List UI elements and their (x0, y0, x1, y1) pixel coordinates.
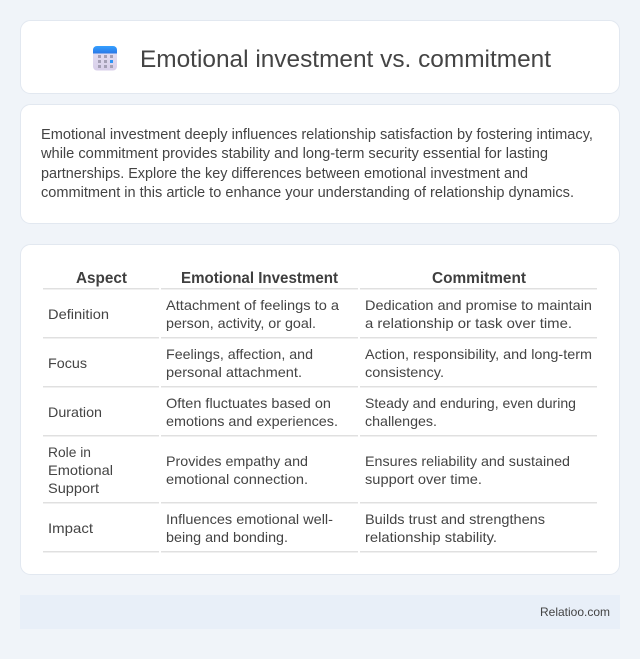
table row: focus: Focus (48, 355, 87, 371)
table row: definition: Dedication and promise to maintain (365, 297, 592, 313)
table row: role in emotional support (48, 444, 570, 496)
table row: duration: emotions and experiences. (166, 413, 338, 429)
table row: duration: Steady and enduring, even during (365, 395, 576, 411)
table row: focus: consistency. (365, 364, 444, 380)
table row: duration: Often fluctuates based on (166, 395, 331, 411)
panel: introduction (20, 104, 620, 224)
panel: comparison table (20, 244, 620, 574)
table row: duration (48, 395, 576, 429)
title: Emotional investment vs. commitment (140, 46, 551, 73)
table row: definition (48, 297, 592, 331)
table header row (76, 270, 526, 287)
text block: introduction paragraph: Emotional investment deeply influences relationship satisfaction by fostering intimacy, (41, 127, 593, 143)
text block: introduction paragraph: while commitment provides stability and long-term security essential for lasting (40, 146, 548, 162)
footer (20, 595, 620, 629)
table row: impact: Builds trust and strengthens (365, 511, 545, 527)
table header row: Emotional Investment (181, 270, 338, 287)
footer: Relatioo.com (540, 605, 610, 619)
text block: introduction paragraph (40, 127, 593, 201)
table row: role in emotional support: Emotional (48, 462, 113, 478)
table row: role in emotional support: emotional connection. (166, 471, 308, 487)
table row: duration: Duration (48, 404, 102, 420)
table row: focus (48, 346, 592, 380)
table row: definition: person, activity, or goal. (166, 315, 316, 331)
text block: introduction paragraph: partnerships. Explore the key differences between emotional investment and (41, 166, 528, 182)
table row: role in emotional support: support over time. (365, 471, 482, 487)
table row: focus: Action, responsibility, and long-term (365, 346, 592, 362)
table row: definition: a relationship or task over time. (365, 315, 572, 331)
icon: calendar (93, 46, 117, 70)
table row: impact (48, 511, 545, 545)
table row: focus: personal attachment. (166, 364, 302, 380)
panel: title header (20, 20, 620, 94)
table row: impact: relationship stability. (365, 529, 497, 545)
table row: role in emotional support: Ensures reliability and sustained (365, 453, 570, 469)
table row: definition: Attachment of feelings to a (166, 297, 339, 313)
text block: introduction paragraph: commitment in this article to enhance your understanding of relationship dynamics. (41, 185, 574, 201)
table row: duration: challenges. (365, 413, 437, 429)
table header row: Commitment (432, 270, 526, 287)
table row: impact: being and bonding. (166, 529, 288, 545)
table row: impact: Impact (48, 520, 93, 536)
table row: role in emotional support: Role in (48, 444, 91, 460)
table row: focus: Feelings, affection, and (166, 346, 313, 362)
table row: role in emotional support: Provides empathy and (166, 453, 308, 469)
table row: definition: Definition (48, 306, 109, 322)
table header row: Aspect (76, 270, 127, 287)
table row: role in emotional support: Support (48, 480, 99, 496)
table row: impact: Influences emotional well- (166, 511, 333, 527)
